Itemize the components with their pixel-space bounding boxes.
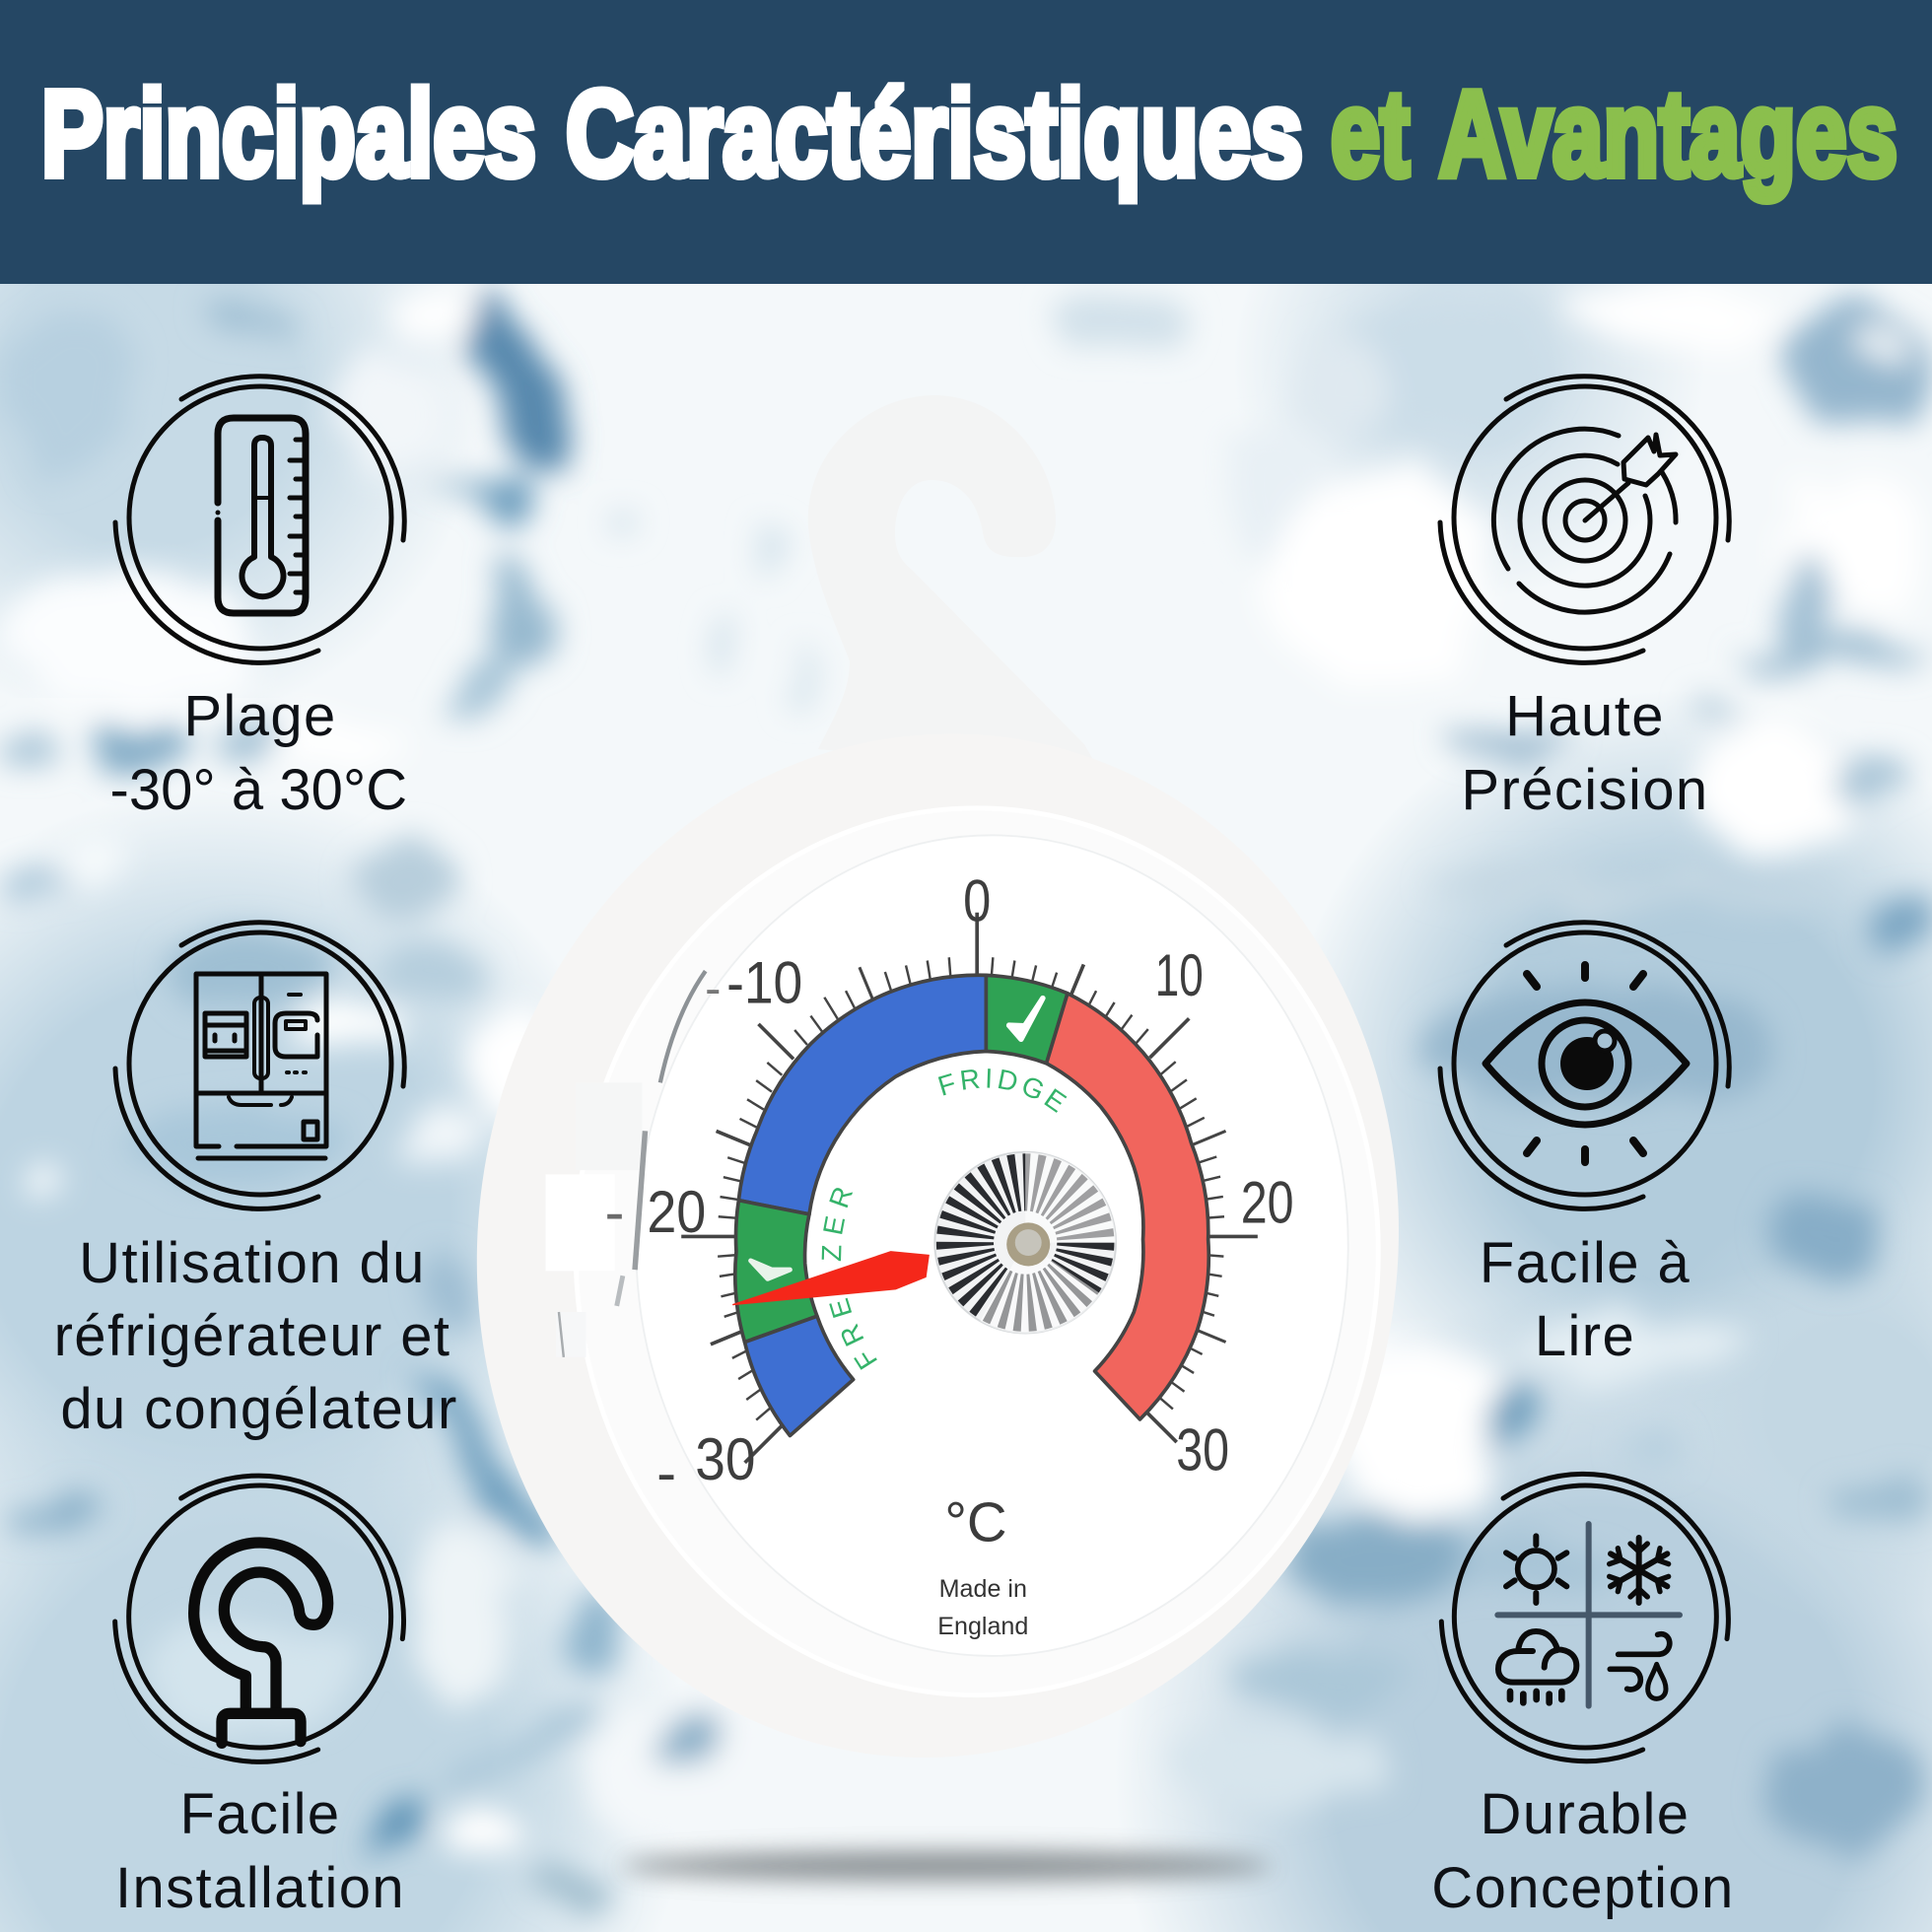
- scale numbers: [604, 867, 1294, 1506]
- scale numbers: -: [604, 1179, 624, 1245]
- check mark: fridge: [1009, 999, 1043, 1039]
- scale numbers: 30: [1176, 1416, 1229, 1483]
- label: durable design: Durable: [1481, 1782, 1690, 1846]
- thermometer product: [372, 412, 1504, 1739]
- tick marks: [681, 913, 1258, 1463]
- label: easy to read: Lire: [1535, 1304, 1635, 1368]
- band: red: [1047, 994, 1208, 1419]
- label: durable design: Conception: [1431, 1856, 1735, 1920]
- label: fridge and freezer use: [54, 1231, 458, 1441]
- feature: easy to read: [1440, 923, 1729, 1368]
- label: easy to read: Facile à: [1480, 1231, 1690, 1295]
- housing: [411, 673, 1465, 1818]
- label: fridge and freezer use: Utilisation du: [79, 1231, 426, 1295]
- feature: high precision: [1440, 377, 1729, 822]
- feature: temperature range: [110, 377, 408, 822]
- scale numbers: 20: [1241, 1169, 1294, 1235]
- scale numbers: -: [705, 962, 721, 1015]
- made in england: [937, 1575, 1028, 1640]
- feature: durable design: [1431, 1474, 1735, 1920]
- freezer label: FREEZER: [822, 1188, 877, 1370]
- band: green freezer: [735, 1201, 817, 1343]
- band: blue lower: [744, 1316, 854, 1435]
- icon: thermometer: [115, 377, 404, 662]
- title: Principales: [41, 67, 536, 202]
- label: high precision: [1461, 684, 1709, 822]
- label: temperature range: -30° à 30°C: [110, 758, 408, 822]
- icon: eye: [1440, 923, 1729, 1208]
- label: fridge and freezer use: du congélateur: [60, 1377, 458, 1441]
- unit label: °C: [944, 1491, 1007, 1553]
- cover glare and lugs: [545, 971, 706, 1357]
- made in england: Made in: [939, 1575, 1027, 1603]
- label: temperature range: Plage: [183, 684, 337, 748]
- icon: weather: [1441, 1474, 1728, 1761]
- fridge label: FRIDGE: [938, 1069, 1067, 1113]
- label: easy installation: Installation: [115, 1856, 405, 1920]
- colored scale bands: [735, 975, 1208, 1435]
- scale numbers: 10: [1155, 942, 1204, 1008]
- dial face: [636, 835, 1348, 1656]
- clear cover: [576, 808, 1378, 1695]
- band: green fridge: [986, 975, 1068, 1064]
- band: blue upper: [738, 975, 986, 1214]
- hub: [933, 1151, 1117, 1335]
- title: Caractéristiques: [566, 67, 1303, 202]
- label: temperature range: [110, 684, 408, 822]
- icon: fridge: [115, 923, 404, 1208]
- scale numbers: 0: [963, 867, 991, 933]
- header band: [0, 0, 1932, 284]
- title: [41, 67, 1898, 202]
- made in england: England: [937, 1613, 1028, 1640]
- white areas: [384, 298, 483, 333]
- label: high precision: Haute: [1505, 684, 1665, 748]
- feature: fridge and freezer use: [54, 923, 458, 1441]
- feature: easy installation: [115, 1476, 405, 1920]
- check mark: freezer: [751, 1261, 790, 1278]
- thermometer dial: [477, 806, 1399, 1709]
- title: et: [1331, 67, 1410, 202]
- label: fridge and freezer use: réfrigérateur et: [54, 1304, 450, 1368]
- label: easy to read: [1480, 1231, 1690, 1368]
- label: high precision: Précision: [1461, 758, 1709, 822]
- icon: target: [1440, 377, 1729, 662]
- label: easy installation: Facile: [179, 1782, 341, 1846]
- needle: [732, 1252, 929, 1305]
- hook: [808, 395, 1104, 779]
- scale numbers: 30: [695, 1426, 756, 1492]
- scale numbers: 20: [647, 1179, 706, 1245]
- icon: hook: [115, 1476, 404, 1761]
- floor shadow: [621, 1851, 1272, 1881]
- scale numbers: -: [656, 1440, 676, 1506]
- scale numbers: -10: [726, 950, 802, 1016]
- label: durable design: [1431, 1782, 1735, 1920]
- label: easy installation: [115, 1782, 405, 1920]
- blue structures: [473, 284, 567, 473]
